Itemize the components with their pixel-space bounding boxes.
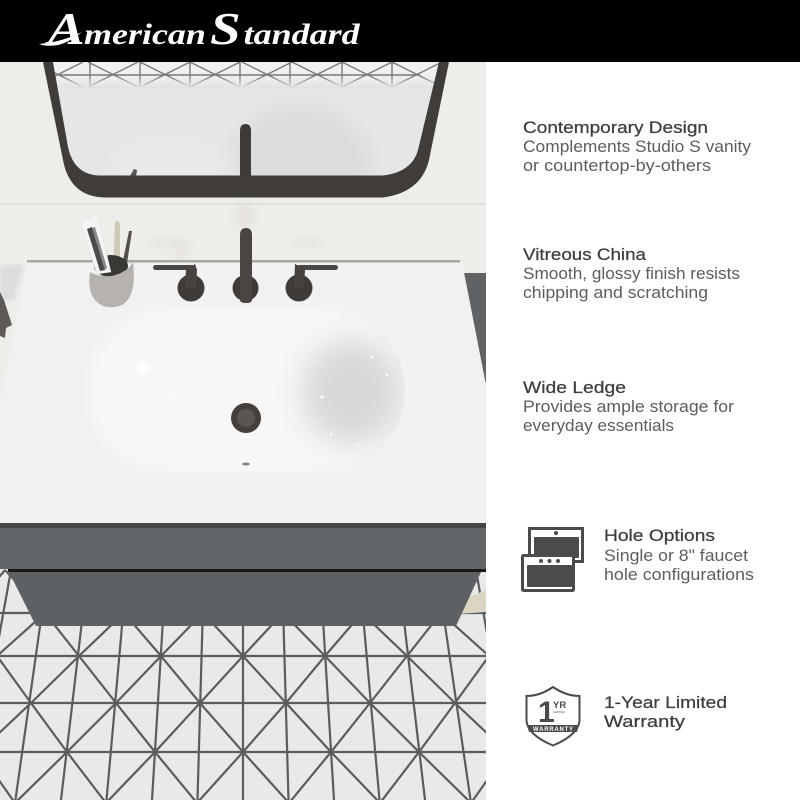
toothbrush light: [114, 220, 120, 257]
faucet set: [153, 228, 338, 303]
feature: Wide Ledge: everyday essentials: [523, 417, 674, 435]
toothpaste tube: [80, 214, 111, 274]
wall tile joint: [0, 203, 486, 204]
basin bowl: [88, 308, 402, 472]
logo wordmark: A: [45, 3, 85, 54]
feature: Wide Ledge: Wide Ledge: [523, 378, 626, 397]
feature: Hole Options: Hole Options: [604, 526, 715, 545]
basin shadow: [302, 340, 402, 444]
mirror reflection: toothbrush: [130, 169, 137, 176]
floor: [0, 566, 518, 800]
toothpaste label: [87, 227, 107, 271]
toothbrush cup: [80, 214, 134, 307]
basin: [136, 340, 405, 466]
feature: 1-Year Limited Warranty: [604, 693, 727, 731]
icon: warranty shield: [526, 687, 580, 746]
mirror: [43, 62, 449, 198]
right handle: [286, 264, 338, 302]
vanity cabinet: [0, 523, 486, 626]
lower drawer: [9, 572, 481, 626]
countertop back edge: [27, 260, 460, 262]
feature: Vitreous China: Vitreous China: [523, 245, 647, 264]
feature: Vitreous China: Smooth, glossy finish resists: [523, 265, 740, 283]
logo wordmark: S: [210, 3, 241, 54]
overflow hole: [242, 462, 250, 466]
countertop: [464, 273, 486, 383]
left handle: [153, 264, 204, 302]
feature: 1-Year Limited Warranty: 1-Year Limited: [604, 693, 727, 712]
floor grout grid: [0, 570, 518, 800]
basin highlights: [137, 356, 388, 446]
icon: warranty shield: YR: [553, 700, 566, 711]
feature: 1-Year Limited Warranty: Warranty: [604, 712, 686, 731]
feature: Contemporary Design: Contemporary Design: [523, 118, 708, 137]
icon: warranty shield: 1: [538, 696, 555, 729]
mirror reflection: basin shadow: [240, 113, 362, 176]
feature: Wide Ledge: Provides ample storage for: [523, 398, 735, 416]
header bar: [0, 0, 800, 62]
feature: Contemporary Design: [523, 118, 752, 175]
upper panel: [0, 528, 486, 569]
mirror glass: [58, 88, 432, 176]
logo wordmark: [39, 3, 360, 54]
floor background object: [462, 590, 486, 614]
feature: Hole Options: Single or 8" faucet: [604, 547, 748, 565]
logo wordmark: merican: [84, 18, 206, 51]
drain: [231, 403, 261, 433]
photo: vanity sink scene: [0, 62, 518, 800]
faucet shadows on wall: [177, 208, 251, 252]
cup body: [89, 262, 134, 307]
counter underside: [0, 523, 486, 528]
left side shadow and towel: [0, 265, 24, 338]
wall: [0, 62, 486, 404]
drawer gap: [8, 569, 486, 572]
header background: [0, 0, 800, 62]
mirror reflection: lighter bowl: [110, 135, 230, 205]
wall shadow: [0, 265, 24, 300]
spout: [232, 228, 258, 303]
icon: warranty shield: WARRANTY: [533, 727, 573, 733]
floor tiles base: [0, 566, 486, 800]
icon: hole options: [522, 528, 582, 590]
feature: Vitreous China: [523, 245, 740, 302]
feature: Hole Options: hole configurations: [604, 566, 754, 584]
feature: Vitreous China: chipping and scratching: [523, 284, 708, 302]
feature: Contemporary Design: Complements Studio S vanity: [523, 138, 752, 156]
icon: warranty shield: LIMITED: [553, 710, 566, 714]
vanity side at right: [464, 273, 486, 383]
logo wordmark: tandard: [244, 18, 360, 51]
feature: Hole Options: [604, 526, 754, 584]
towel: [0, 292, 12, 338]
mirror reflection: faucet: [240, 124, 251, 176]
mirror contents: [53, 62, 439, 176]
cup opening: [94, 255, 128, 277]
feature: Contemporary Design: or countertop-by-others: [523, 157, 711, 175]
toothbrush dark: [123, 231, 132, 263]
feature: Wide Ledge: [523, 378, 735, 435]
logo swash: [39, 32, 82, 46]
mirror frame: [43, 62, 449, 198]
